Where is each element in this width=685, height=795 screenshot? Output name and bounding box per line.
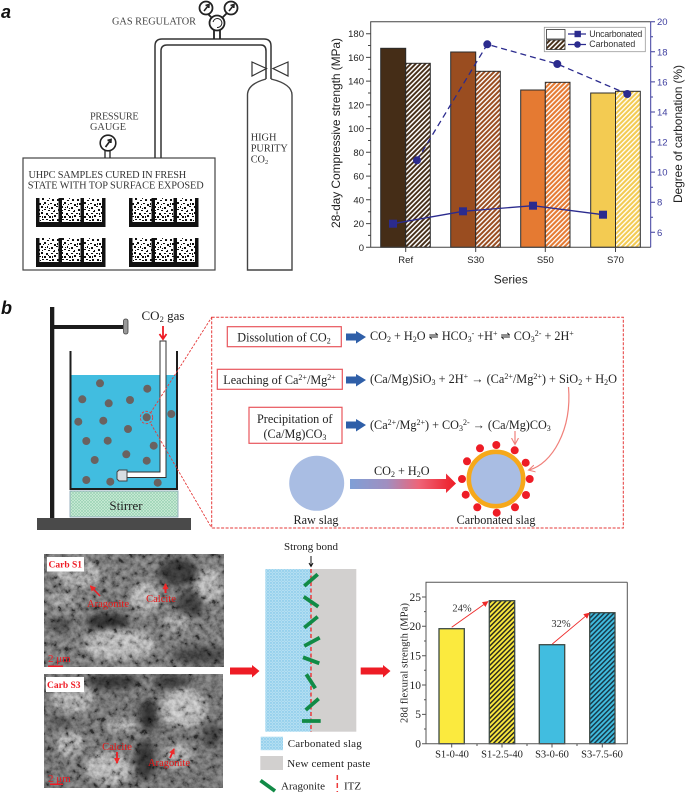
equation 2: O — [608, 372, 617, 386]
bars — [439, 601, 615, 744]
conversion label: O — [421, 464, 430, 478]
chart legend — [544, 27, 645, 52]
x tick labels: S50 — [537, 255, 554, 266]
step box: precipitation: (Ca/Mg)CO — [264, 427, 323, 441]
left axis tick labels: 180 — [348, 29, 364, 40]
step box: dissolution: 2 — [327, 336, 331, 346]
equation 1: + 2H — [541, 329, 569, 343]
ITZ key — [336, 775, 338, 792]
step box: leaching: 2+ — [298, 373, 307, 382]
left axis tick labels: 120 — [348, 100, 364, 111]
ITZ line — [310, 569, 312, 732]
left and bottom axes — [366, 22, 651, 252]
equation 1: CO — [370, 329, 387, 343]
conversion arrow — [350, 474, 456, 493]
equation 2: + — [464, 372, 469, 381]
equation 1: + — [569, 329, 574, 338]
equation 2: 2 — [604, 378, 608, 387]
SEM S1 annotations: Calcite — [146, 594, 176, 605]
regulator label: GAS REGULATOR — [112, 17, 196, 28]
pressure gauge — [100, 135, 116, 158]
panel b: stirred reactor — [37, 307, 212, 530]
carbonated slag layer — [265, 569, 311, 732]
slag particles — [74, 379, 175, 487]
axes — [422, 582, 627, 748]
step box: precipitation: 3 — [322, 433, 326, 442]
gas cylinder — [248, 79, 292, 270]
step box: dissolution: Dissolution of CO — [237, 330, 327, 344]
left axis tick labels: 100 — [348, 124, 364, 135]
equation 2: /Mg — [513, 372, 533, 386]
x axis title: Series — [494, 272, 528, 286]
x tick labels: S3-7.5-60 — [581, 750, 623, 761]
beaker — [70, 351, 177, 489]
silica curved arrow — [529, 387, 569, 470]
equation 3: 2+ — [416, 418, 425, 427]
equation 3: 2- — [463, 418, 470, 427]
panel label b: b — [1, 298, 12, 318]
equation 3: 2+ — [388, 418, 397, 427]
ITZ key label: ITZ — [344, 780, 361, 792]
carbonated slag particle — [458, 441, 534, 517]
conversion label: + H — [395, 464, 417, 478]
equation 1: 3 — [531, 335, 535, 344]
conversion label: CO — [374, 464, 391, 478]
aragonite needles — [302, 574, 321, 721]
strong bond arrow — [309, 556, 313, 566]
equation 1: 2 — [387, 335, 391, 344]
equation 2: 2 — [578, 378, 582, 387]
right axis tick labels: 18 — [657, 47, 668, 58]
left axis tick labels: 140 — [348, 77, 364, 88]
equation 1: + — [493, 329, 498, 338]
y axis title: 28d flexural strength (MPa) — [400, 602, 410, 723]
left axis tick labels: 80 — [353, 148, 364, 159]
interface diagram — [265, 541, 356, 732]
SEM S1 annotations — [47, 557, 176, 667]
SEM S3 annotations — [46, 677, 190, 785]
equation 1: 2- — [535, 329, 542, 338]
cylinder label: PURITY — [251, 144, 288, 155]
water — [71, 375, 176, 488]
cement paste key — [260, 756, 283, 770]
equation 2: (Ca/Mg)SiO — [370, 372, 432, 386]
x tick labels — [398, 255, 624, 266]
blue arrows — [346, 331, 366, 432]
y tick labels: 0 — [415, 738, 421, 750]
y tick labels: 15 — [410, 650, 421, 662]
x tick labels: S3-0-60 — [535, 750, 569, 761]
panel a: curing apparatus schematic — [23, 2, 292, 270]
equation 3: ) + CO — [425, 418, 459, 432]
x tick labels: S1-2.5-40 — [481, 750, 523, 761]
dashed frame — [212, 317, 623, 528]
conversion label: 2 — [391, 470, 395, 479]
carbonate arrow — [514, 431, 516, 444]
interface legend — [260, 737, 370, 792]
equation 3: 3 — [459, 424, 463, 433]
aragonite key — [260, 780, 275, 791]
y tick labels — [410, 592, 421, 750]
step box: dissolution — [227, 327, 341, 347]
chamber — [23, 158, 215, 270]
SEM S1 annotations: Aragonite — [87, 599, 129, 610]
equation 2: + 2H — [436, 372, 464, 386]
equation 3: /Mg — [396, 418, 416, 432]
chart legend: Carbonated — [589, 39, 635, 49]
arrow: SEM to interface — [230, 665, 260, 678]
SEM image: Carb S3 — [44, 674, 223, 788]
32% label: 32% — [551, 619, 571, 630]
right axis tick labels — [657, 17, 668, 239]
strong bond label: Strong bond — [284, 541, 339, 553]
zoom marker — [140, 317, 212, 528]
panel label a: a — [1, 2, 11, 22]
SEM S1 annotations: Carb S1 — [48, 560, 82, 570]
cement paste layer — [311, 569, 356, 732]
CO2 gas label: 2 — [160, 314, 164, 324]
stirrer label: Stirrer — [109, 498, 143, 513]
chamber caption: STATE WITH TOP SURFACE EXPOSED — [28, 181, 204, 192]
cylinder label: 2 — [265, 159, 268, 166]
gas tube — [155, 39, 271, 158]
equation 3: (Ca — [370, 418, 388, 432]
equation 2: 2+ — [504, 372, 513, 381]
right axis title: Degree of carbonation (%) — [671, 65, 685, 203]
panel a: strength and carbonation chart — [329, 17, 685, 286]
equation 2: 3 — [432, 378, 436, 387]
plot frame and bars — [381, 48, 640, 247]
equation 1: 3 — [468, 335, 472, 344]
left axis tick labels: 60 — [353, 172, 364, 183]
CO2 gas label: CO — [142, 308, 160, 323]
SEM S3 annotations: Calcite — [102, 742, 132, 753]
right axis tick labels: 12 — [657, 138, 668, 148]
cylinder label: CO — [251, 155, 266, 166]
left axis tick labels: 0 — [359, 243, 364, 254]
right axis tick labels: 8 — [657, 198, 662, 209]
32% increase arrow — [552, 613, 589, 644]
equation 2: 2+ — [533, 372, 542, 381]
CO2 arrow — [160, 326, 166, 339]
step box: leaching — [217, 369, 342, 389]
SEM S3 annotations: 2 μm — [48, 773, 71, 785]
right axis — [651, 22, 655, 247]
left axis title: 28-day Compressive strength (MPa) — [329, 38, 343, 228]
24% label: 24% — [452, 604, 472, 615]
step box: leaching: Leaching of Ca — [223, 373, 298, 387]
24% increase arrow — [452, 602, 488, 627]
sample trays — [36, 198, 198, 267]
equation 1: ⇌ CO — [497, 329, 531, 343]
x tick labels: S70 — [607, 255, 624, 266]
right axis tick labels: 14 — [657, 108, 668, 118]
carbonated line — [414, 41, 631, 164]
x tick labels: S1-0-40 — [435, 750, 469, 761]
right axis tick labels: 16 — [657, 77, 668, 88]
carbonated slag label: Carbonated slag — [457, 513, 535, 527]
SEM S3 annotations: Aragonite — [148, 758, 190, 769]
y tick labels: 10 — [410, 680, 421, 692]
equation 2: ) + SiO — [542, 372, 578, 386]
y tick labels: 20 — [410, 621, 421, 633]
equation 2: → (Ca — [468, 372, 505, 386]
uncarbonated line — [390, 202, 606, 227]
arrow: interface to chart — [361, 665, 390, 678]
right axis tick labels: 6 — [657, 228, 662, 239]
equation 1: + H — [391, 329, 413, 343]
gas tube in water — [125, 341, 166, 478]
equation 1: O ⇌ HCO — [417, 329, 468, 343]
carbonated slag key label: Carbonated slag — [288, 738, 362, 750]
x tick labels: Ref — [398, 255, 413, 266]
SEM image: Carb S1 — [44, 554, 228, 667]
y tick labels: 25 — [410, 592, 421, 604]
chart legend: Uncarbonated — [589, 29, 642, 39]
equation 3: → (Ca/Mg)CO — [470, 418, 547, 432]
CO2 gas label: gas — [164, 308, 184, 323]
cement paste key label: New cement paste — [287, 758, 370, 770]
chamber caption: UHPC SAMPLES CURED IN FRESH — [28, 170, 187, 181]
raw slag particle — [289, 456, 344, 511]
aragonite key label: Aragonite — [281, 780, 325, 792]
conversion label: 2 — [417, 470, 421, 479]
raw slag label: Raw slag — [293, 513, 339, 527]
pressure gauge label: PRESSURE — [90, 112, 139, 122]
flexural strength chart — [400, 582, 627, 761]
left axis tick labels: 160 — [348, 53, 364, 64]
left axis tick labels: 40 — [353, 195, 364, 206]
carbonated slag key — [261, 737, 283, 750]
pressure gauge label: GAUGE — [90, 122, 126, 133]
equation 3: 3 — [547, 424, 551, 433]
left axis tick labels: 20 — [353, 219, 364, 230]
left axis tick labels — [348, 29, 364, 254]
y tick labels: 5 — [415, 709, 421, 721]
step box: leaching: 2+ — [327, 373, 336, 382]
x tick labels: S30 — [467, 255, 484, 266]
step box: precipitation — [249, 407, 342, 443]
step box: leaching: /Mg — [307, 373, 327, 387]
cylinder label: HIGH — [251, 133, 277, 144]
gas regulator — [200, 2, 238, 39]
equation 2: + H — [582, 372, 604, 386]
equation 1: 2 — [413, 335, 417, 344]
panel b: carbonation mechanism — [212, 317, 623, 528]
equation 1: +H — [474, 329, 493, 343]
SEM S1 annotations: 2 μm — [48, 653, 71, 665]
stirrer plate — [70, 491, 178, 517]
SEM S3 annotations: Carb S3 — [47, 681, 81, 691]
diffuser nozzle — [117, 470, 127, 481]
right axis tick labels: 10 — [657, 168, 668, 179]
right axis tick labels: 20 — [657, 17, 668, 28]
stand — [37, 307, 191, 530]
equation 1: - — [472, 329, 475, 338]
step box: precipitation: Precipitation of — [257, 412, 333, 426]
x tick labels — [435, 750, 623, 761]
cylinder valve — [252, 62, 288, 76]
